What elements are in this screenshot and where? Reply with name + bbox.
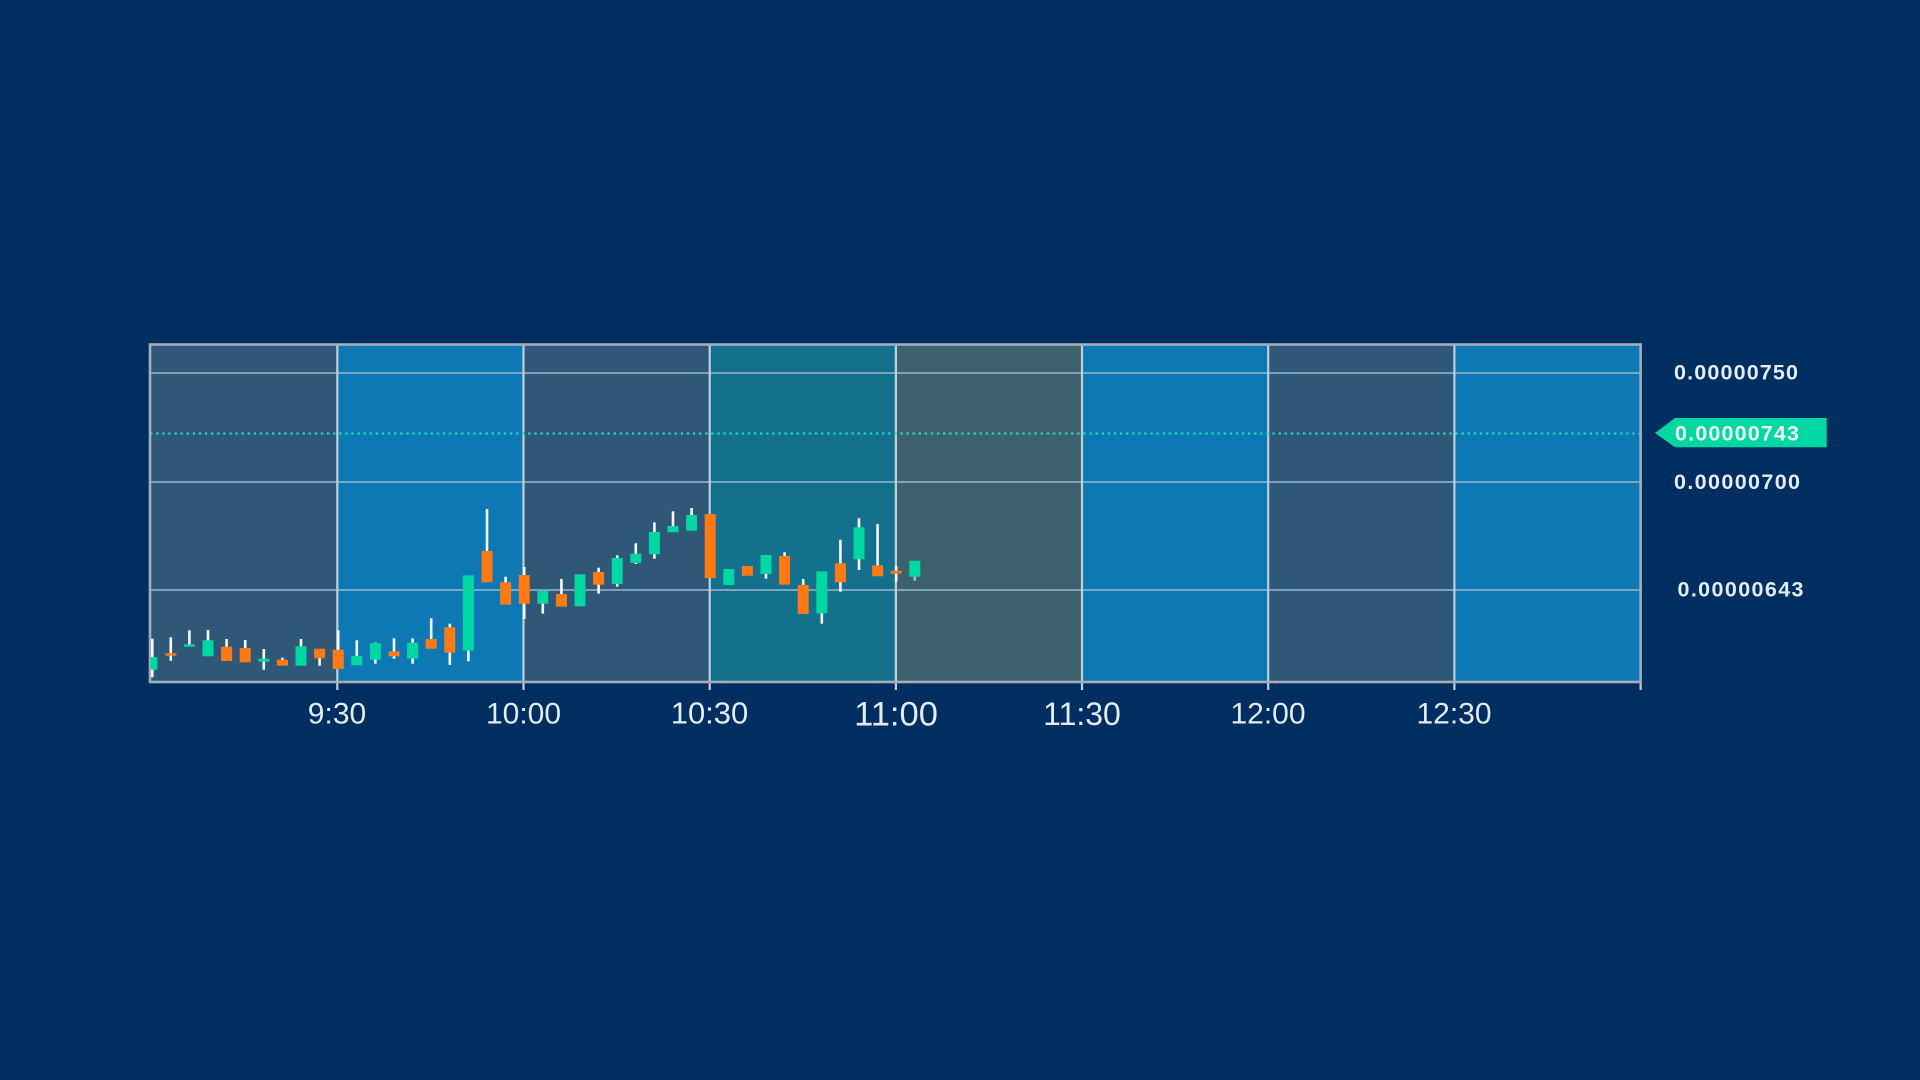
current price dotted line (150, 432, 1640, 435)
candle 34 (760, 555, 772, 579)
candle 35 (779, 552, 790, 585)
label 9:30: 9:30 (308, 698, 366, 730)
candle 2 (165, 637, 176, 661)
candle 33 (742, 566, 753, 576)
label 11:30: 11:30 (1043, 696, 1121, 732)
candle 14 (388, 638, 400, 659)
candle 6 (240, 640, 251, 662)
current price tag: 0.00000743 (1675, 422, 1799, 446)
candle 15 (407, 638, 418, 664)
time axis labels (308, 696, 1492, 734)
label 12:00: 12:00 (1230, 698, 1306, 730)
candle 38 (835, 540, 846, 592)
candle 23 (556, 579, 567, 607)
candlesticks (151, 508, 920, 677)
candle 42 (909, 561, 920, 581)
candle 19 (482, 509, 492, 582)
candle 36 (798, 579, 809, 614)
candle 22 (537, 591, 548, 614)
candle 30 (686, 508, 697, 531)
label 11:00: 11:00 (854, 696, 938, 734)
candle 41 (891, 566, 902, 582)
label 10:30: 10:30 (671, 696, 748, 730)
price label 0.00000643: 0.00000643 (1678, 578, 1804, 602)
price label 0.00000700: 0.00000700 (1674, 470, 1800, 494)
candle 10 (314, 649, 325, 666)
candle 1 (151, 639, 157, 677)
candle 12 (351, 640, 362, 665)
candle 24 (574, 574, 586, 606)
candle 9 (296, 639, 306, 666)
candle 40 (872, 524, 883, 576)
candle 39 (854, 518, 864, 570)
candle 27 (630, 543, 641, 564)
candle 4 (202, 630, 214, 656)
candle 17 (444, 624, 455, 665)
candle 11 (333, 630, 344, 669)
candle 26 (612, 555, 623, 587)
plot background bands (150, 344, 1640, 682)
candle 29 (668, 511, 678, 532)
candle 31 (705, 514, 716, 578)
plot frame (150, 344, 1641, 682)
price label 0.00000750: 0.00000750 (1674, 360, 1798, 384)
current price tag (1655, 418, 1827, 447)
label 12:30: 12:30 (1416, 698, 1492, 730)
vertical grid lines and axis ticks (337, 344, 1641, 690)
candle 20 (500, 577, 511, 605)
candle 8 (277, 658, 288, 666)
candle 25 (593, 568, 604, 594)
label 10:00: 10:00 (486, 698, 561, 730)
candle 32 (723, 569, 734, 585)
price axis labels (1655, 360, 1827, 602)
candle 16 (426, 618, 437, 649)
horizontal grid lines (150, 373, 1641, 590)
candle 37 (816, 571, 827, 624)
candle 3 (184, 630, 195, 647)
candle 7 (258, 649, 269, 670)
candle 13 (370, 643, 381, 664)
candle 5 (221, 639, 232, 661)
candle 18 (463, 575, 474, 661)
candle 28 (649, 522, 660, 559)
candle 21 (519, 567, 530, 619)
